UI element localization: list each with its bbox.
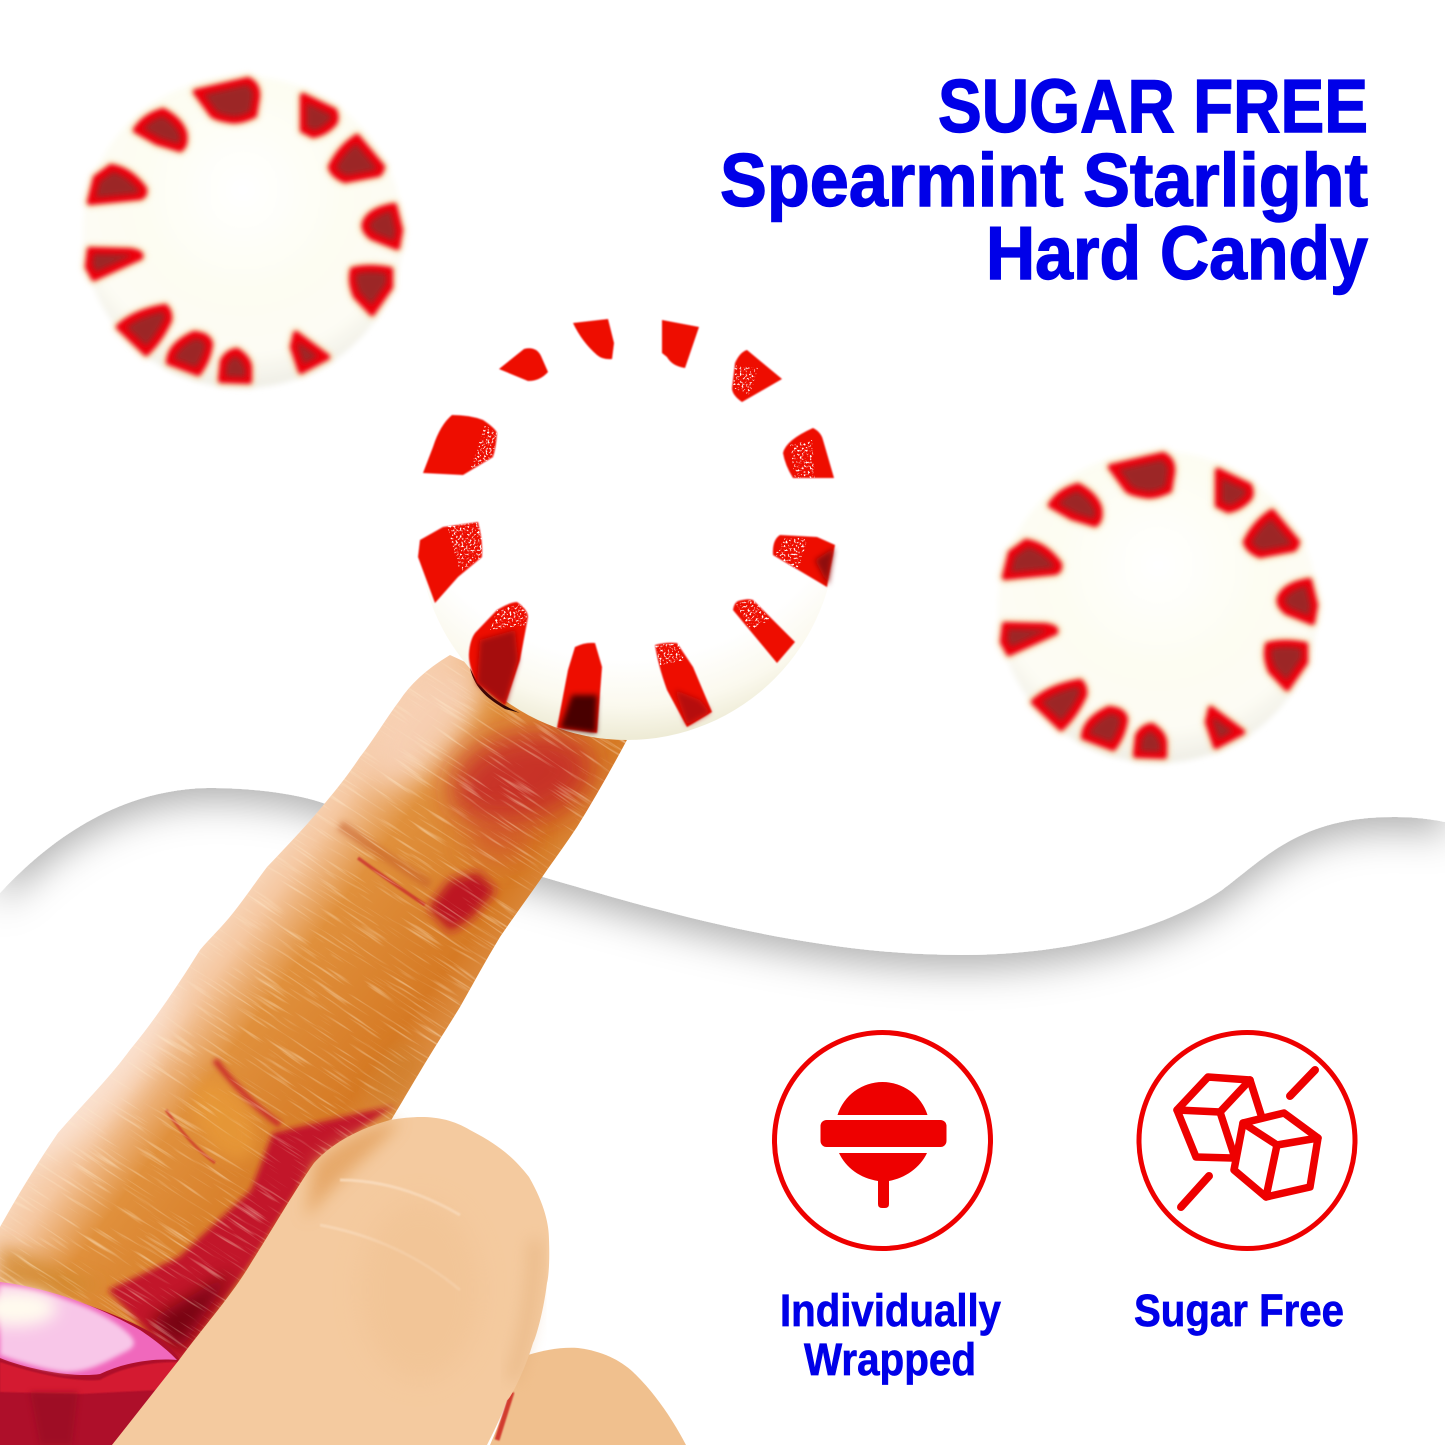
icon: sugar cubes crossed out — [1139, 1032, 1355, 1248]
title: Hard Candy — [986, 211, 1368, 295]
candy body — [418, 320, 836, 740]
cubes glyph — [1177, 1077, 1318, 1197]
slash ticks — [1181, 1070, 1315, 1207]
thumb — [112, 1117, 549, 1445]
circle outline — [774, 1032, 990, 1248]
label: individually wrapped: Individually — [780, 1285, 1001, 1336]
red seam between fingers — [497, 1392, 512, 1440]
icon: lollipop — [774, 1032, 990, 1248]
red wedges — [418, 319, 835, 733]
title: Spearmint Starlight — [720, 138, 1368, 222]
wedge sparkles — [447, 365, 815, 665]
index finger — [0, 655, 627, 1445]
title: SUGAR FREE — [938, 64, 1368, 148]
circle outline — [1139, 1032, 1355, 1248]
hand holding candy — [0, 612, 703, 1445]
third finger — [490, 1348, 686, 1445]
label: individually wrapped — [780, 1285, 1001, 1385]
blurred candy: right — [998, 451, 1318, 763]
main candy — [418, 319, 836, 740]
label: sugar free: Sugar Free — [1134, 1285, 1344, 1336]
thumb shading — [305, 1120, 535, 1380]
nail finger — [0, 1282, 180, 1445]
blurred candy: top left — [83, 76, 403, 388]
background: white wave with shadow — [0, 0, 1445, 955]
candy shadow sliver — [470, 668, 520, 713]
label: individually wrapped: Wrapped — [804, 1334, 976, 1385]
wedge shading — [477, 548, 834, 733]
lollipop glyph — [820, 1082, 946, 1208]
title — [720, 64, 1368, 295]
